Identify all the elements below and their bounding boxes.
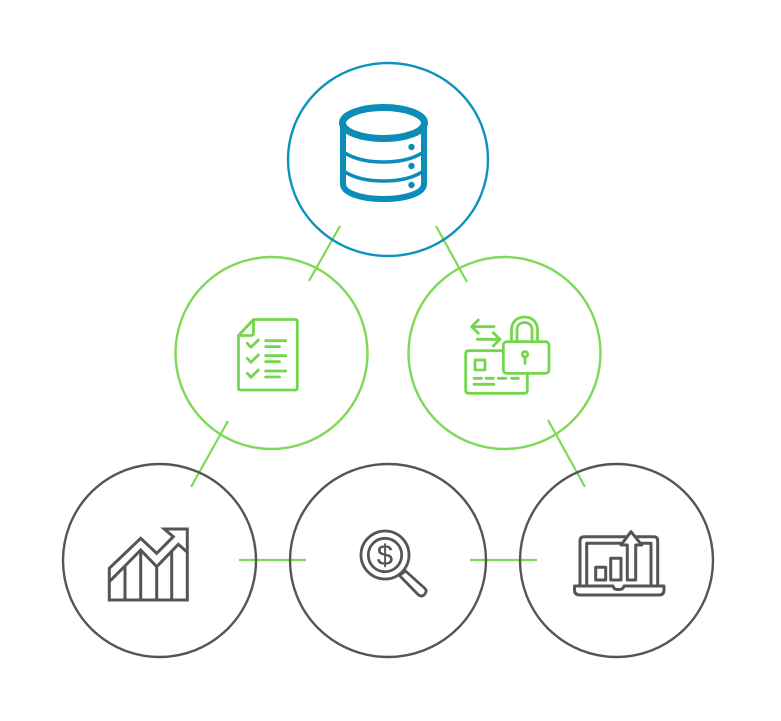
circle: bottom middle gray bbox=[290, 464, 486, 657]
icon: card with padlock and exchange arrows bbox=[466, 317, 549, 393]
circle: right green bbox=[408, 257, 600, 449]
icon: checklist document bbox=[238, 320, 297, 390]
circle: bottom left gray bbox=[63, 464, 256, 657]
connector: chart circle to magnifier circle bbox=[239, 559, 306, 561]
icon: laptop with bar chart and arrow bbox=[574, 532, 664, 595]
connector: left green circle to chart circle bbox=[191, 421, 228, 487]
connector: top circle to left green circle bbox=[309, 226, 340, 281]
icon: magnifier with dollar sign bbox=[361, 531, 426, 596]
circle: top blue bbox=[288, 63, 488, 256]
circle: left green bbox=[176, 257, 368, 449]
dollar sign: $ bbox=[377, 540, 393, 572]
connector: magnifier circle to laptop circle bbox=[470, 559, 537, 561]
icon: database bbox=[342, 108, 424, 199]
icon: rising line chart bbox=[109, 529, 187, 600]
connector: top circle to right green circle bbox=[436, 226, 467, 282]
connector: right green circle to laptop circle bbox=[548, 420, 585, 487]
circle: bottom right gray bbox=[520, 464, 713, 657]
